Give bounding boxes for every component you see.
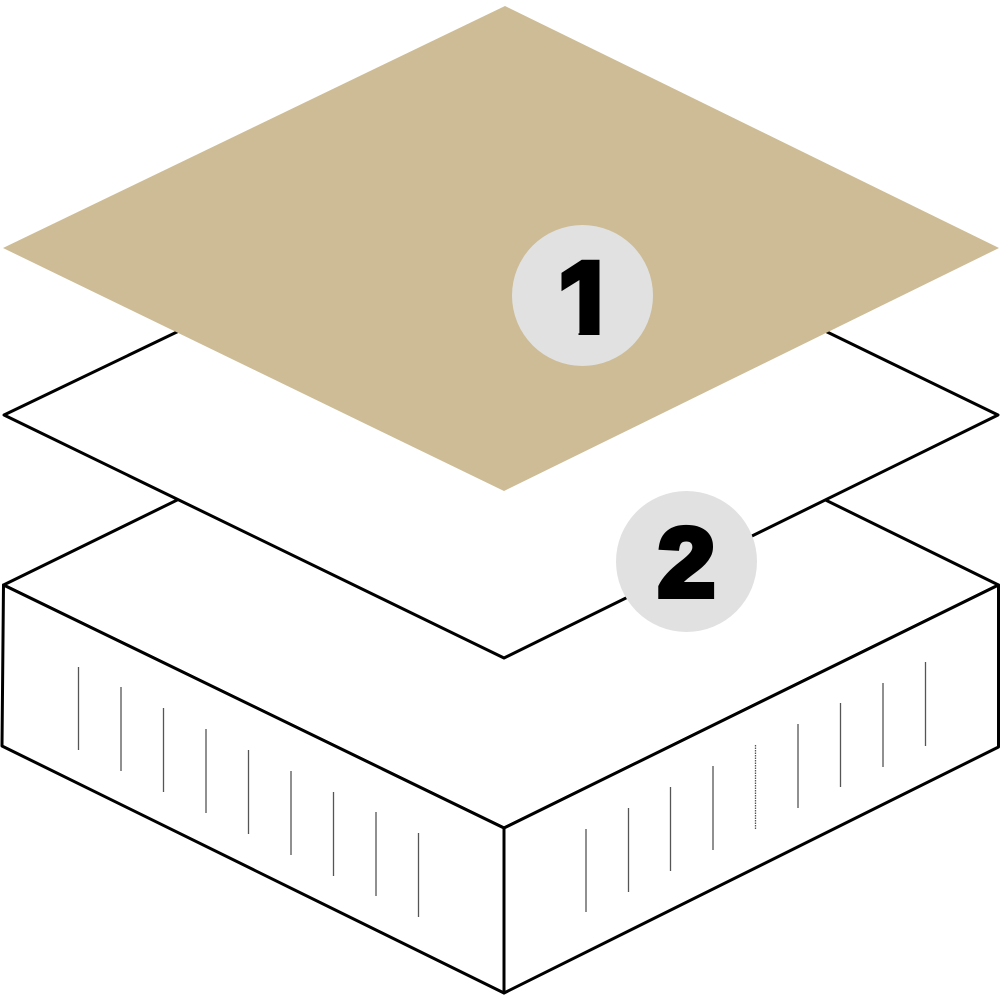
mattress right side stitching — [586, 662, 926, 912]
layer 1: tan sheet — [3, 6, 999, 491]
badge 1: 1 — [552, 236, 622, 375]
badge 2 — [616, 491, 757, 632]
badge 2: 2 — [658, 510, 715, 617]
badge 1 — [512, 225, 653, 375]
layer 2: white sheet — [4, 175, 998, 658]
mattress left side stitching — [78, 667, 418, 917]
mattress base block — [2, 341, 998, 993]
